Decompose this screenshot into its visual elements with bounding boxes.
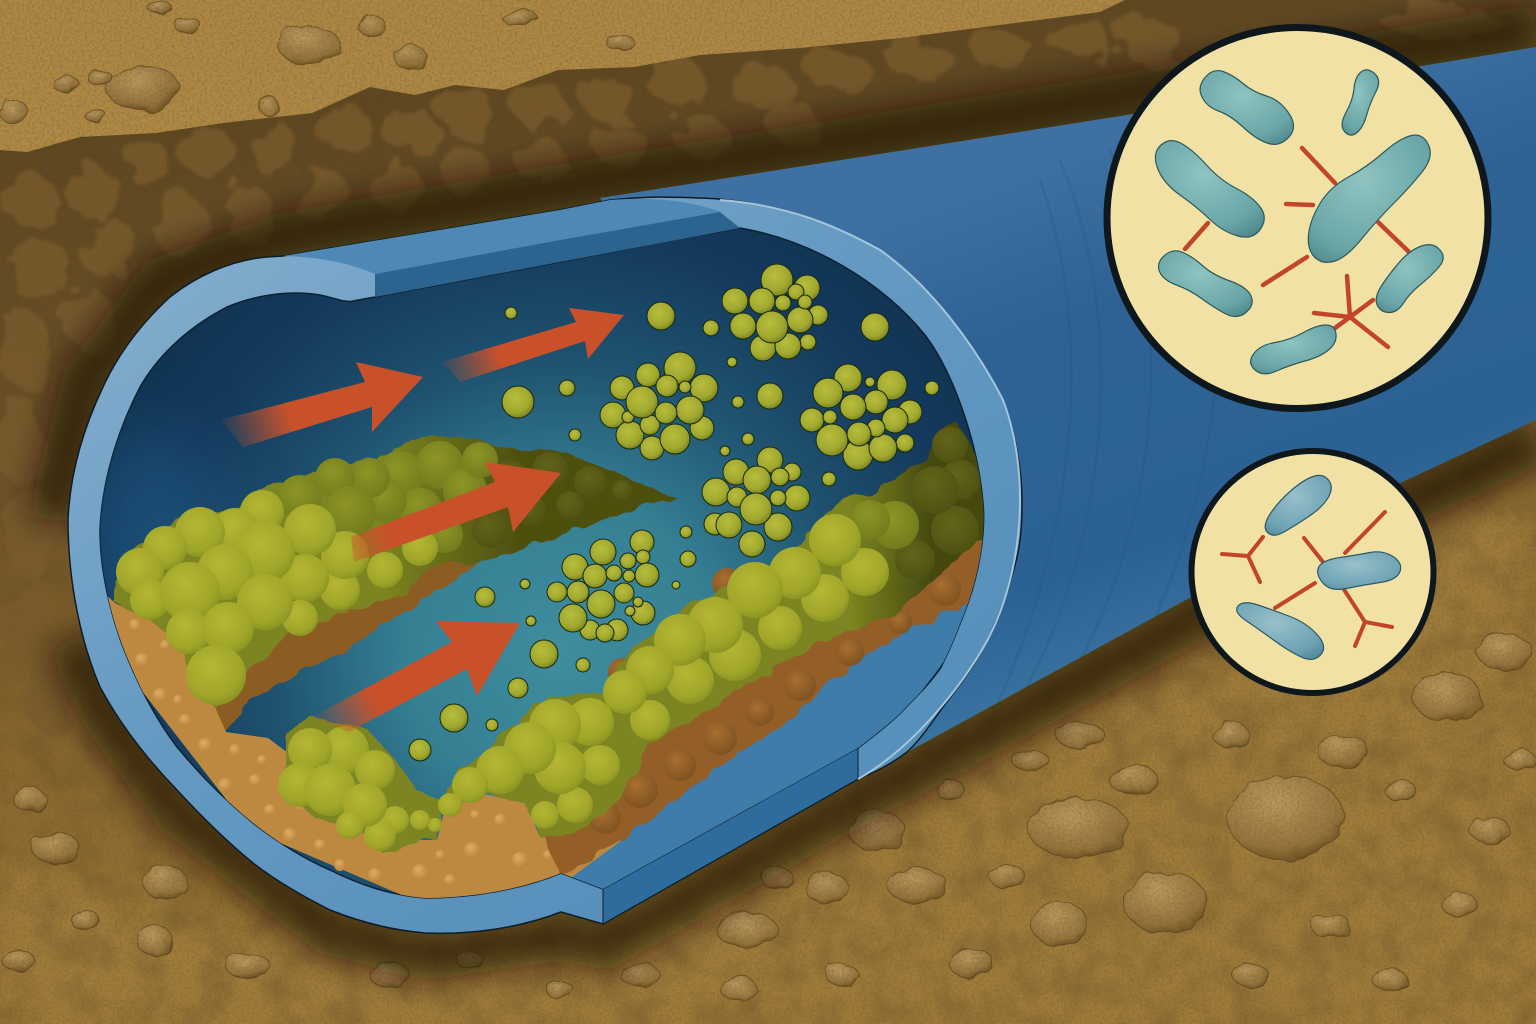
pipe interior — [100, 228, 984, 898]
interior contents — [80, 422, 990, 905]
buried rocks — [2, 635, 1536, 1000]
bacteria — [1237, 475, 1401, 659]
pipe body — [600, 47, 1536, 779]
cluster 4 — [702, 447, 810, 557]
top cut surface — [283, 199, 720, 274]
flow arrow 1 — [220, 362, 423, 447]
upper soil surface — [0, 0, 1125, 152]
magnified view: small circle — [1192, 451, 1434, 693]
flow arrow 4 — [312, 621, 520, 732]
flow arrow 3 — [351, 462, 561, 562]
surface rocks — [0, 2, 634, 123]
bacteria — [1155, 70, 1443, 374]
pipe rim — [68, 197, 1022, 933]
rim highlights — [720, 200, 1020, 779]
cluster 1 — [722, 264, 828, 361]
filaments — [1185, 148, 1409, 347]
top cut inner wall — [375, 212, 740, 297]
pipe shadow on trench — [50, 27, 1536, 520]
floating microbe clusters — [409, 264, 939, 761]
lower soil glow — [0, 480, 1536, 1024]
left water tone — [100, 415, 222, 606]
cluster 5 — [547, 530, 659, 642]
lower wall — [551, 594, 971, 889]
filaments — [1222, 512, 1392, 646]
orange sediment — [95, 585, 625, 905]
trench clods — [0, 2, 1500, 732]
cluster 2 — [600, 352, 718, 460]
single microbes — [409, 302, 939, 761]
pipe ring streaks — [990, 130, 1218, 720]
lower biofilm band — [278, 422, 990, 853]
cluster 3 — [800, 364, 922, 470]
brown deposit under upper band — [212, 527, 573, 730]
upper biofilm band — [115, 436, 678, 707]
flow arrow 2 — [442, 308, 624, 382]
brown deposit under lower band — [525, 530, 990, 876]
magnified view: large circle — [1107, 28, 1488, 408]
pipe shadow on soil — [70, 440, 1536, 955]
cut end face — [603, 748, 858, 924]
